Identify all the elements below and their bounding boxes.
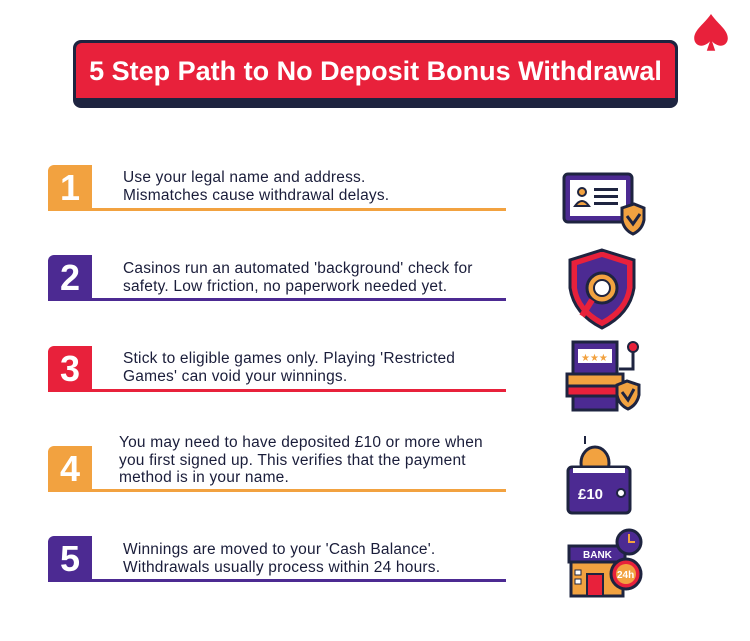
- text 2: Casinos run an automated 'background' check for: [123, 260, 473, 277]
- number 3: 3: [60, 348, 80, 389]
- text 4: [119, 434, 483, 486]
- line 4: [48, 489, 506, 492]
- number 5: 5: [60, 538, 80, 579]
- title banner: [73, 40, 678, 108]
- number 5: [48, 536, 92, 581]
- text 3: Stick to eligible games only. Playing 'Restricted: [123, 350, 455, 367]
- icon: wallet with coin: £10: [578, 486, 603, 503]
- step 4: [48, 434, 506, 492]
- icon: slot machine: [566, 340, 640, 412]
- number 1: [48, 165, 92, 210]
- step 3: [48, 346, 506, 392]
- text 1: Mismatches cause withdrawal delays.: [123, 186, 389, 204]
- number 1: 1: [60, 167, 80, 208]
- line 1: [48, 208, 506, 211]
- icon: slot machine: ★★★: [581, 353, 608, 364]
- step 2: [48, 255, 506, 301]
- text 5: Winnings are moved to your 'Cash Balance'.: [123, 541, 435, 558]
- text 3: Games' can void your winnings.: [123, 368, 347, 384]
- text 4: You may need to have deposited £10 or more when: [119, 434, 483, 451]
- icon: ID card: [562, 172, 646, 236]
- text 1: [123, 169, 389, 204]
- line 2: [48, 298, 506, 301]
- number 4: [48, 446, 92, 491]
- text 2: [123, 260, 473, 294]
- icon: bank 24h: [568, 528, 642, 598]
- text 3: [123, 350, 455, 384]
- text 4: method is in your name.: [119, 469, 289, 486]
- step 1: [48, 165, 506, 211]
- step 5: [48, 536, 506, 582]
- line 3: [48, 389, 506, 392]
- icon: shield magnifier: [568, 248, 636, 330]
- number 2: [48, 255, 92, 300]
- text 4: you first signed up. This verifies that the payment: [119, 452, 466, 468]
- icon: wallet with coin: [566, 436, 632, 514]
- logo: spade: [694, 14, 728, 51]
- title banner: 5 Step Path to No Deposit Bonus Withdrawal: [89, 56, 662, 86]
- text 5: [123, 541, 440, 576]
- number 3: [48, 346, 92, 391]
- icon: bank 24h: 24h: [617, 570, 634, 581]
- number 4: 4: [60, 448, 80, 489]
- text 2: safety. Low friction, no paperwork needed yet.: [123, 278, 447, 294]
- number 2: 2: [60, 257, 80, 298]
- text 5: Withdrawals usually process within 24 hours.: [123, 558, 440, 576]
- text 1: Use your legal name and address.: [123, 169, 365, 186]
- icon: bank 24h: BANK: [583, 550, 613, 561]
- line 5: [48, 579, 506, 582]
